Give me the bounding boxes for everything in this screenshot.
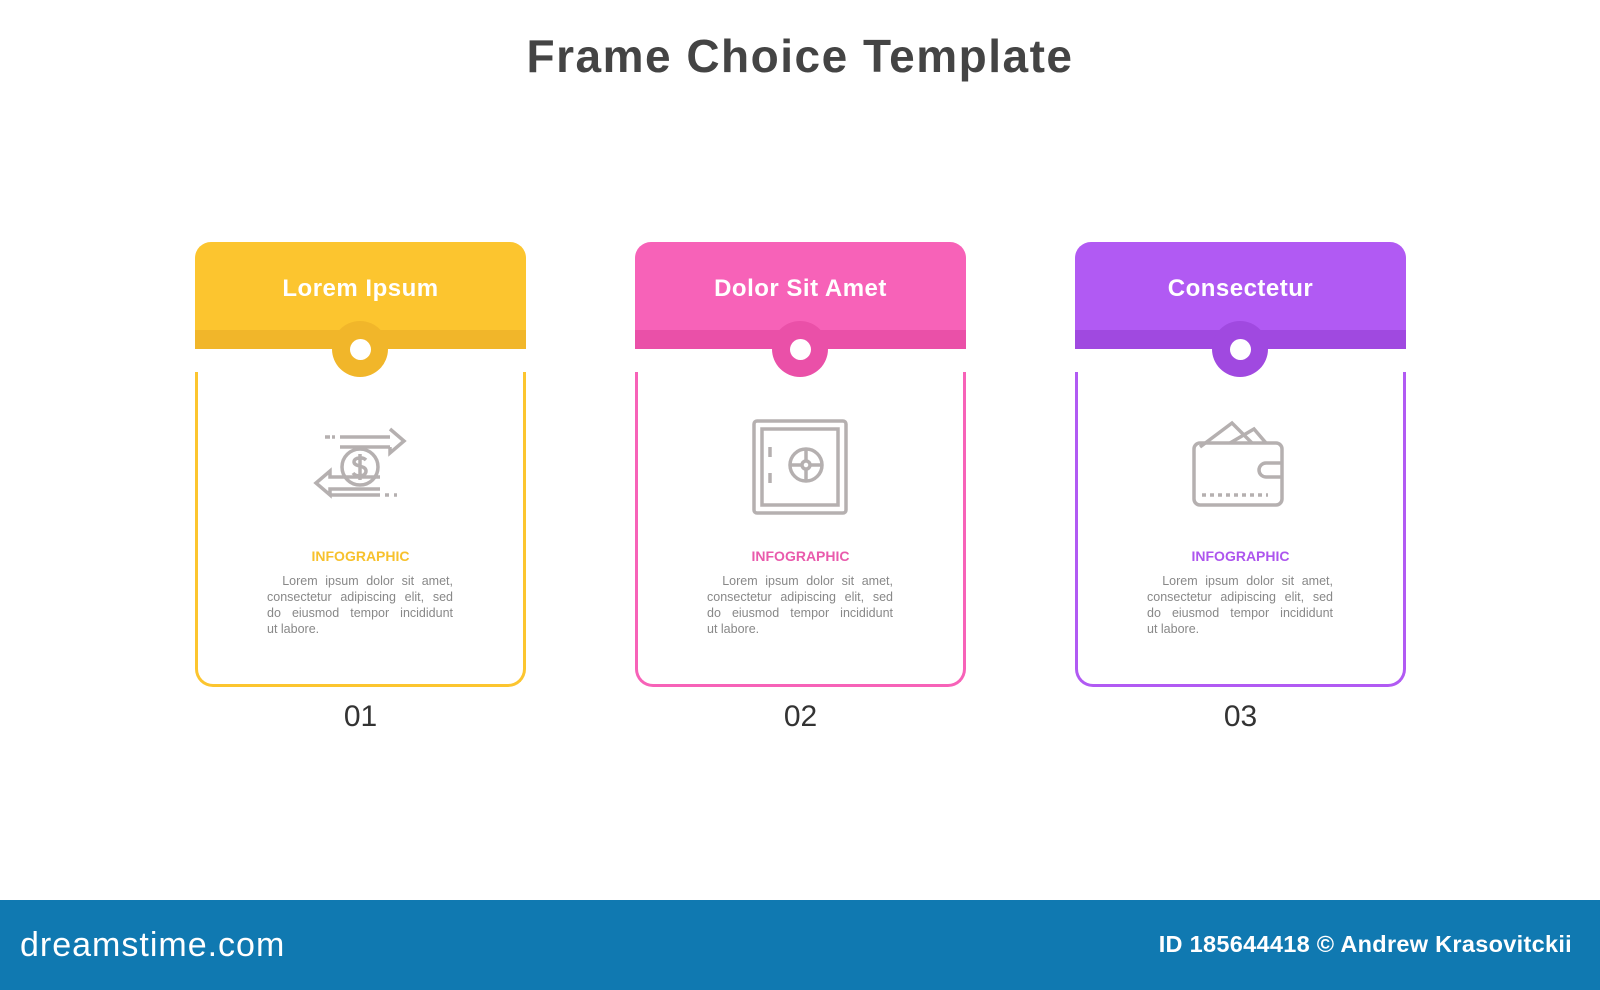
label 2: INFOGRAPHIC <box>752 548 850 564</box>
text 2: do eiusmod tempor incididunt <box>707 606 893 620</box>
frame 1 <box>195 372 526 687</box>
frame 3 <box>1075 372 1406 687</box>
label 3: INFOGRAPHIC <box>1192 548 1290 564</box>
credit: ID 185644418 © Andrew Krasovitckii <box>1159 931 1572 957</box>
footer banner <box>0 900 1600 990</box>
number 2: 02 <box>784 700 817 733</box>
text 2: Lorem ipsum dolor sit amet, <box>722 574 893 588</box>
text 3: consectetur adipiscing elit, sed <box>1147 590 1333 604</box>
text 1: consectetur adipiscing elit, sed <box>267 590 453 604</box>
number 1: 01 <box>344 700 377 733</box>
text 1: Lorem ipsum dolor sit amet, <box>282 574 453 588</box>
header 2 <box>635 242 966 349</box>
text 3: do eiusmod tempor incididunt <box>1147 606 1333 620</box>
frame 2 <box>635 372 966 687</box>
text 1 <box>267 574 453 636</box>
icon: money exchange <box>314 428 406 499</box>
text 2 <box>707 574 893 636</box>
text 1: ut labore. <box>267 622 319 636</box>
text 3 <box>1147 574 1333 636</box>
header 1: Lorem Ipsum <box>282 275 439 302</box>
panel: card 3 <box>1075 242 1406 733</box>
icon: wallet <box>1192 420 1284 507</box>
header 3: Consectetur <box>1168 275 1313 302</box>
header 3 <box>1075 242 1406 349</box>
tab 3 <box>1212 321 1268 377</box>
text 2: consectetur adipiscing elit, sed <box>707 590 893 604</box>
panel: card 1 <box>195 242 526 733</box>
label 1: INFOGRAPHIC <box>312 548 410 564</box>
brand: dreamstime.com <box>20 926 285 964</box>
title: Frame Choice Template <box>526 30 1074 82</box>
text 3: ut labore. <box>1147 622 1199 636</box>
icon: safe <box>752 419 848 515</box>
text 1: do eiusmod tempor incididunt <box>267 606 453 620</box>
panel: card 2 <box>635 242 966 733</box>
header 1 <box>195 242 526 349</box>
text 2: ut labore. <box>707 622 759 636</box>
tab 2 <box>772 321 828 377</box>
text 3: Lorem ipsum dolor sit amet, <box>1162 574 1333 588</box>
header 2: Dolor Sit Amet <box>714 275 887 302</box>
number 3: 03 <box>1224 700 1257 733</box>
tab 1 <box>332 321 388 377</box>
